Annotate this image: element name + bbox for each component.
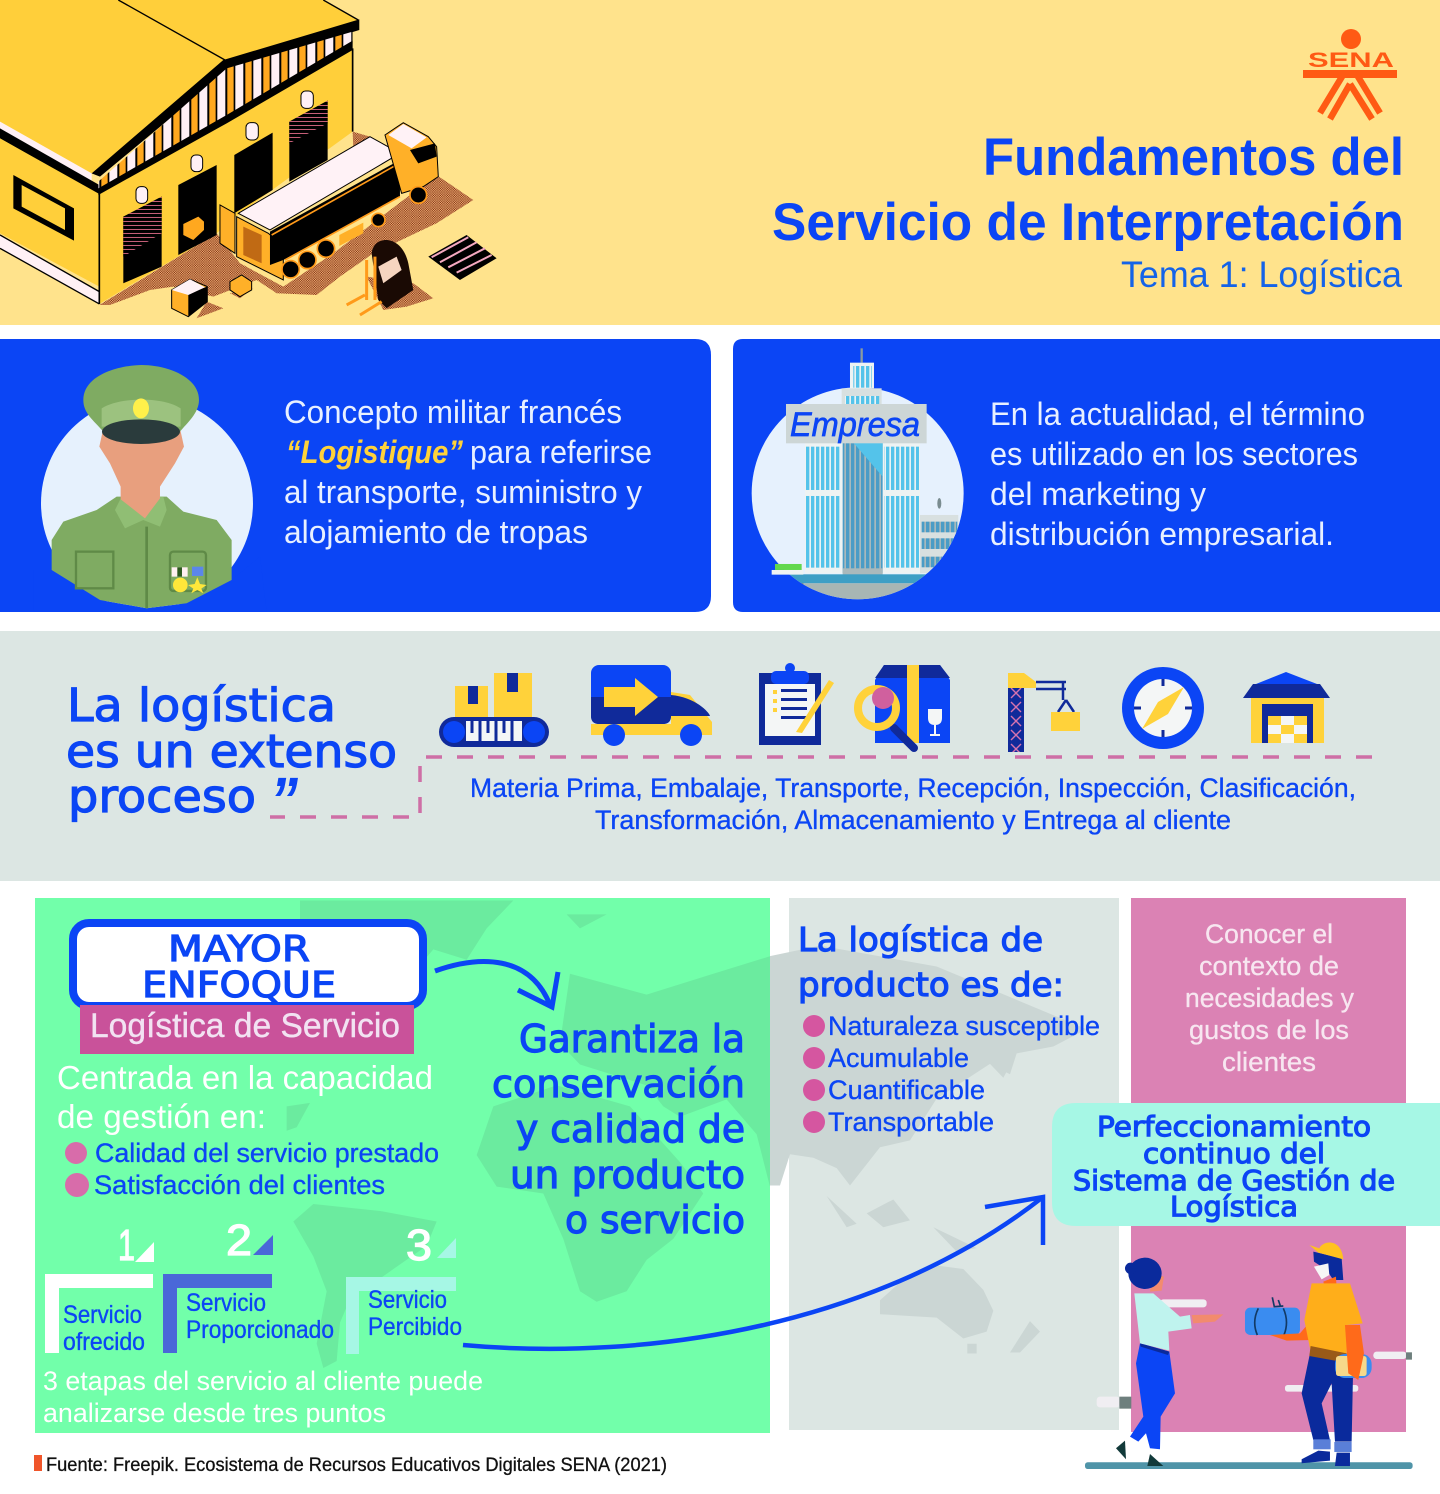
text: concept: “Logistique” — [286, 434, 463, 470]
icon: crane — [1008, 673, 1080, 752]
text: current use: distribución empresarial. — [990, 516, 1334, 552]
world map: asia and oceania — [770, 946, 1087, 1353]
icon: conveyor — [439, 673, 549, 747]
panel: service logistics — [35, 898, 770, 1433]
closing quote mark: ” — [270, 764, 298, 836]
panel: business use — [733, 339, 1440, 612]
list: product traits: Naturaleza susceptible — [828, 1011, 1100, 1041]
label: Empresa: Empresa — [790, 406, 920, 444]
figure: customer — [1116, 1258, 1223, 1466]
text: know the customer: clientes — [1222, 1047, 1316, 1077]
icon: warehouse — [1243, 672, 1330, 743]
text: three stages — [43, 1366, 483, 1428]
panel: military origin — [0, 339, 711, 612]
text: concept — [284, 394, 652, 550]
text: guarantee: Garantiza la — [519, 1017, 745, 1061]
heading: process: proceso — [68, 770, 256, 823]
text: know the customer: contexto de — [1199, 951, 1339, 981]
stage 3: Servicio — [368, 1286, 447, 1314]
text: three stages: analizarse desde tres puntos — [43, 1398, 386, 1428]
enfoque box — [73, 923, 423, 1054]
callout: continuous improvement — [1052, 1103, 1440, 1226]
stage 1: 1 — [118, 1221, 135, 1270]
illustration: delivery scene — [1085, 1243, 1413, 1469]
tag: service logistics: Logística de Servicio — [90, 1007, 400, 1045]
heading: product — [798, 920, 1064, 1004]
heading: process: es un extenso — [66, 725, 397, 778]
stage 2: Proporcionado — [186, 1316, 334, 1344]
list: service focus — [65, 1138, 439, 1200]
icon: compass — [1122, 667, 1204, 749]
text: guarantee: o servicio — [565, 1198, 745, 1242]
text: concept: para referirse — [470, 434, 652, 470]
text: current use — [990, 396, 1365, 552]
panel: customer knowledge — [1131, 898, 1406, 1432]
callout: continuous improvement: continuo del — [1143, 1137, 1325, 1170]
text: know the customer: necesidades y — [1185, 983, 1354, 1013]
icon: soldier — [33, 365, 267, 611]
title — [772, 128, 1404, 295]
icon: clipboard — [759, 663, 834, 745]
text: three stages: 3 etapas del servicio al cliente puede — [43, 1366, 483, 1396]
heading: product: La logística de — [798, 920, 1043, 959]
stage 1: Servicio — [63, 1301, 142, 1329]
text: process stages — [470, 773, 1356, 835]
stage 3: Percibido — [368, 1313, 462, 1341]
callout: continuous improvement: Perfeccionamiento — [1097, 1110, 1371, 1143]
text: current use: del marketing y — [990, 476, 1206, 512]
panel: product logistics — [770, 898, 1119, 1430]
arrow: perceived service to improvement — [463, 1197, 1043, 1349]
text: know the customer — [1185, 919, 1354, 1077]
stage 2: Servicio — [186, 1289, 266, 1317]
panel: extended process — [0, 631, 1440, 881]
stage 2 — [163, 1216, 334, 1353]
list: product traits: Acumulable — [828, 1043, 969, 1073]
text: current use: En la actualidad, el término — [990, 396, 1365, 432]
text: concept: al transporte, suministro y — [284, 474, 642, 510]
text: know the customer: gustos de los — [1189, 1015, 1349, 1045]
text: management capacity: de gestión en: — [57, 1098, 266, 1135]
callout: continuous improvement: Logística — [1170, 1190, 1298, 1223]
arrow: enfoque to guarantee — [435, 962, 558, 1007]
callout: continuous improvement: Sistema de Gestión de — [1073, 1164, 1395, 1197]
logo: SENA: SENA — [1308, 49, 1394, 72]
icon: company building — [752, 348, 964, 600]
enfoque box: ENFOQUE — [142, 965, 336, 1006]
text: concept: Concepto militar francés — [284, 394, 622, 430]
icon: delivery truck — [591, 665, 712, 746]
heading: process: La logística — [67, 679, 336, 732]
text: know the customer: Conocer el — [1205, 919, 1333, 949]
heading: process — [66, 679, 397, 823]
text: current use: es utilizado en los sectores — [990, 436, 1358, 472]
title: Servicio de Interpretación — [772, 193, 1404, 252]
enfoque box: MAYOR — [168, 929, 310, 970]
heading: product: producto es de: — [798, 965, 1064, 1004]
text: management capacity — [57, 1059, 433, 1135]
logo: SENA — [1303, 29, 1397, 119]
text: guarantee: y calidad de — [516, 1107, 745, 1151]
stage 2: 2 — [226, 1216, 252, 1265]
text: guarantee: un producto — [510, 1153, 745, 1197]
stage 3: 3 — [406, 1221, 432, 1270]
text: guarantee — [492, 1017, 745, 1242]
icon: parcel — [1245, 1297, 1300, 1335]
stage 1 — [45, 1221, 154, 1356]
list: product traits — [803, 1011, 1100, 1137]
list: product traits: Cuantificable — [828, 1075, 985, 1105]
header banner — [0, 0, 1440, 325]
stage 3 — [346, 1221, 462, 1354]
footer source: Fuente: Freepik. Ecosistema de Recursos Educativos Digitales SENA (2021) — [46, 1455, 667, 1476]
figure: courier — [1270, 1243, 1372, 1466]
text: concept: alojamiento de tropas — [284, 514, 588, 550]
list: service focus: Satisfacción del clientes — [94, 1170, 385, 1200]
stage 1: ofrecido — [63, 1328, 145, 1356]
icon: inspection box — [858, 665, 950, 748]
text: guarantee: conservación — [492, 1062, 745, 1106]
text: process stages: Transformación, Almacenamiento y Entrega al cliente — [595, 805, 1231, 835]
text: management capacity: Centrada en la capacidad — [57, 1059, 433, 1096]
title: Fundamentos del — [983, 128, 1404, 187]
world map: americas, europe and africa — [287, 900, 770, 1368]
illustration: warehouse with truck — [0, 0, 497, 318]
title: Tema 1: Logística — [1121, 254, 1402, 295]
list: service focus: Calidad del servicio prestado — [95, 1138, 439, 1168]
text: process stages: Materia Prima, Embalaje, Transporte, Recepción, Inspección, Clasificación, — [470, 773, 1356, 803]
list: product traits: Transportable — [828, 1107, 994, 1137]
